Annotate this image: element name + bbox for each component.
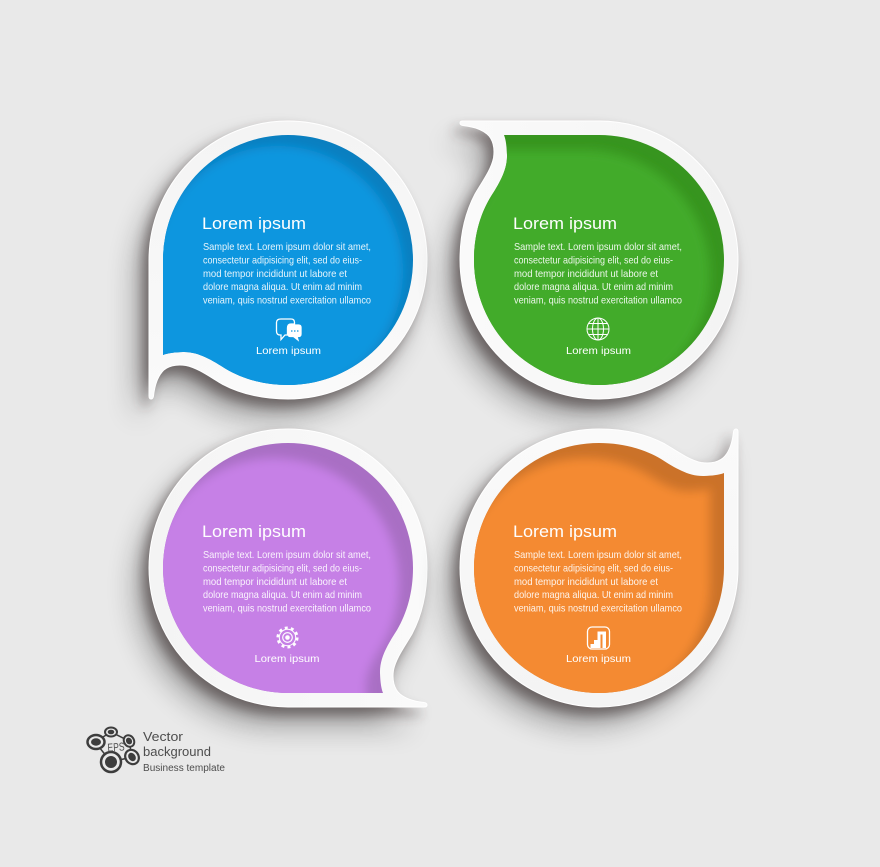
body text: green xyxy=(514,242,682,307)
heading: purple: Lorem ipsum xyxy=(202,522,306,541)
logo: EPS badge xyxy=(88,728,225,774)
body text: green: consectetur adipisicing elit, sed do eius- xyxy=(514,255,673,266)
body text: blue: dolore magna aliqua. Ut enim ad minim xyxy=(203,282,362,293)
body text: green: Sample text. Lorem ipsum dolor sit amet, xyxy=(514,242,682,253)
white rim: green bubble xyxy=(460,121,738,399)
body text: orange: Sample text. Lorem ipsum dolor sit amet, xyxy=(514,550,682,561)
body text: blue: mod tempor incididunt ut labore et xyxy=(203,269,347,280)
text: Vector background: background xyxy=(143,744,211,759)
text: Vector background xyxy=(143,729,211,759)
body text: purple xyxy=(203,550,371,615)
body text: orange: dolore magna aliqua. Ut enim ad minim xyxy=(514,590,673,601)
body text: green: veniam, quis nostrud exercitation ullamco xyxy=(514,296,682,307)
body text: purple: mod tempor incididunt ut labore et xyxy=(203,577,347,588)
orange fill with inner shadow xyxy=(474,443,724,693)
body text: orange: consectetur adipisicing elit, sed do eius- xyxy=(514,563,673,574)
body text: blue: Sample text. Lorem ipsum dolor sit amet, xyxy=(203,242,371,253)
body text: orange: mod tempor incididunt ut labore et xyxy=(514,577,658,588)
label: purple: Lorem ipsum xyxy=(254,653,320,665)
label: orange: Lorem ipsum xyxy=(566,653,631,665)
heading: blue: Lorem ipsum xyxy=(202,214,306,233)
icon: bar chart xyxy=(588,627,610,649)
white rim: purple bubble xyxy=(149,429,427,707)
body text: purple: veniam, quis nostrud exercitation ullamco xyxy=(203,604,371,615)
drop shadow: blue bubble xyxy=(135,129,421,419)
panel: green speech bubble xyxy=(446,120,740,419)
body text: green: mod tempor incididunt ut labore et xyxy=(514,269,658,280)
drop shadow: orange bubble xyxy=(446,437,732,727)
body text: purple: consectetur adipisicing elit, sed do eius- xyxy=(203,563,362,574)
green fill with inner shadow xyxy=(474,135,724,385)
drop shadow: green bubble xyxy=(446,129,732,419)
text: EPS: EPS xyxy=(107,741,125,755)
icon: gear xyxy=(278,628,297,647)
body text: orange: veniam, quis nostrud exercitation ullamco xyxy=(514,604,682,615)
purple fill with inner shadow xyxy=(163,443,413,693)
blue fill with inner shadow xyxy=(163,135,413,385)
heading: green: Lorem ipsum xyxy=(513,214,617,233)
text: Business template: Business template xyxy=(143,763,225,774)
panel: blue speech bubble xyxy=(135,120,430,419)
panel: purple speech bubble xyxy=(135,428,430,727)
body text: blue: consectetur adipisicing elit, sed do eius- xyxy=(203,255,362,266)
text: Vector background: Vector xyxy=(143,729,184,744)
panel: orange speech bubble xyxy=(446,428,740,727)
label: green: Lorem ipsum xyxy=(566,345,631,357)
body text: purple: dolore magna aliqua. Ut enim ad minim xyxy=(203,590,362,601)
icon: globe xyxy=(587,318,609,340)
body text: orange xyxy=(514,550,682,615)
icon: EPS network emblem xyxy=(88,728,142,772)
body text: blue xyxy=(203,242,371,307)
body text: green: dolore magna aliqua. Ut enim ad minim xyxy=(514,282,673,293)
drop shadow: purple bubble xyxy=(135,437,421,727)
white rim: blue bubble xyxy=(149,121,427,399)
label: blue: Lorem ipsum xyxy=(256,345,321,357)
white rim: orange bubble xyxy=(460,429,738,707)
heading: orange: Lorem ipsum xyxy=(513,522,617,541)
icon: chat bubbles xyxy=(276,319,301,340)
body text: purple: Sample text. Lorem ipsum dolor sit amet, xyxy=(203,550,371,561)
body text: blue: veniam, quis nostrud exercitation ullamco xyxy=(203,296,371,307)
